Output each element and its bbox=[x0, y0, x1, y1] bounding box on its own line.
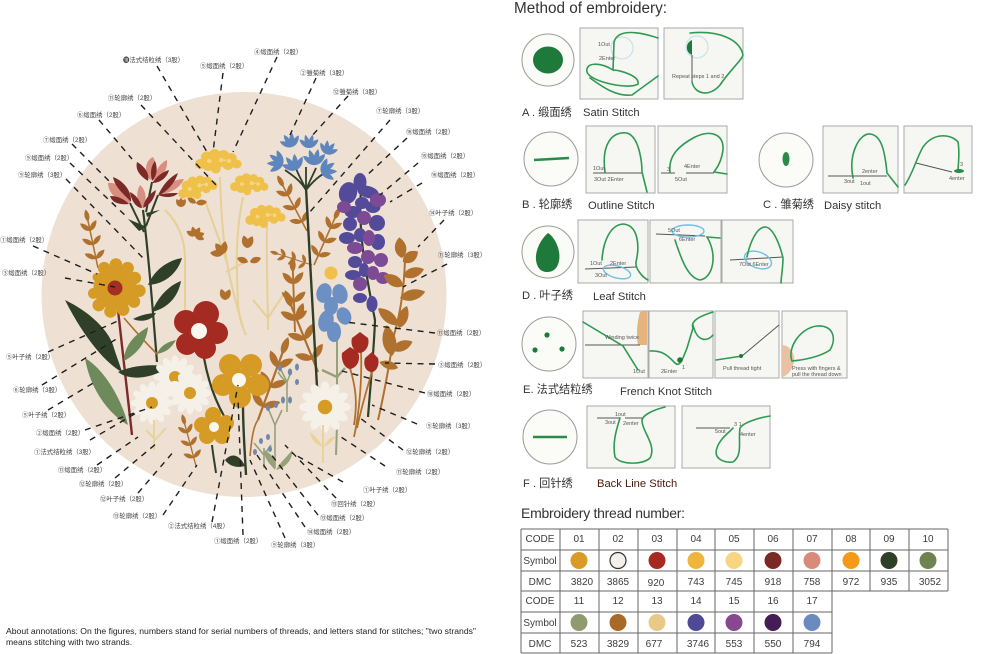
panel: A satin stitch: Satin Stitch bbox=[583, 107, 640, 119]
panel: F back line stitch: F . 回针绣 bbox=[523, 476, 573, 490]
panel: A satin stitch: 1Out bbox=[598, 42, 610, 48]
panel: D leaf stitch: 7Out 6Enter bbox=[739, 262, 769, 268]
thread labels around the pattern: ①法式结粒绣（3股） bbox=[34, 447, 95, 456]
table: thread codes: 920 bbox=[648, 578, 665, 589]
thread labels around the pattern: ⑬缎面绣（2股） bbox=[320, 513, 368, 522]
panel: B outline stitch: 3 bbox=[667, 167, 670, 173]
table: thread codes: 14 bbox=[690, 596, 702, 607]
panel: D leaf stitch: 1Out bbox=[590, 261, 602, 267]
heading: embroidery thread number: Embroidery thread number: bbox=[521, 505, 685, 521]
table: thread codes: 677 bbox=[646, 639, 663, 650]
leaves: cream daisy foliage bbox=[310, 425, 336, 463]
table: thread codes bbox=[521, 529, 948, 653]
thread labels around the pattern: ❿法式结粒绣（3股） bbox=[123, 55, 184, 64]
panel: C daisy stitch: C . 雏菊绣 bbox=[763, 198, 814, 211]
thread labels around the pattern: ②法式结粒绣（4股） bbox=[168, 521, 229, 530]
table: thread codes: 745 bbox=[726, 577, 743, 588]
flower: daisies bbox=[130, 356, 212, 450]
thread labels around the pattern: ⑤叶子绣（2股） bbox=[6, 352, 54, 361]
thread labels around the pattern: ⑩缎面绣（2股） bbox=[427, 389, 475, 398]
table: thread codes: 02 bbox=[612, 534, 624, 545]
thread labels around the pattern: ⑫雏菊绣（3股） bbox=[333, 87, 381, 96]
panel: floral embroidery pattern bbox=[42, 92, 446, 497]
thread labels around the pattern: ①缎面绣（2股） bbox=[214, 536, 262, 545]
table: thread codes: CODE bbox=[526, 534, 555, 545]
thread labels around the pattern: ⑥轮廓绣（3股） bbox=[13, 385, 61, 394]
icon: yellow flower clusters bbox=[175, 149, 286, 230]
panel: B outline stitch: Outline Stitch bbox=[588, 200, 655, 212]
thread labels around the pattern: ①缎面绣（2股） bbox=[0, 235, 48, 244]
thread labels around the pattern: ⑪缎面绣（2股） bbox=[58, 465, 106, 474]
icon: small brown sprigs among the stems bbox=[174, 196, 262, 301]
panel: E french knot stitch: 1Out bbox=[633, 369, 645, 375]
panel: C daisy stitch: 1out bbox=[860, 181, 871, 187]
thread labels around the pattern: ⑦轮廓绣（3股） bbox=[376, 106, 424, 115]
panel: A satin stitch: Repeat steps 1 and 2 bbox=[672, 74, 724, 80]
thread labels around the pattern: ⑨轮廓绣（3股） bbox=[18, 170, 66, 179]
panel: E french knot stitch: 2Enter bbox=[661, 369, 677, 375]
panel: E french knot stitch: Press with fingers & bbox=[792, 366, 841, 372]
thread labels around the pattern: ④缎面绣（2股） bbox=[254, 47, 302, 56]
background circle bbox=[42, 92, 446, 497]
table: thread codes: 13 bbox=[651, 596, 663, 607]
panel: D leaf stitch: Leaf Stitch bbox=[593, 291, 646, 303]
panel: F back line stitch: 2enter bbox=[623, 421, 639, 427]
panel: D leaf stitch bbox=[522, 220, 793, 303]
flower: purple wisteria bbox=[336, 173, 390, 417]
thread labels around the pattern: ⑬轮廓绣（2股） bbox=[113, 511, 161, 520]
panel: E french knot stitch: 1 bbox=[682, 365, 685, 371]
flower: small yellow bloom bbox=[194, 407, 245, 473]
flower: red buds bbox=[342, 332, 379, 437]
table: thread codes: 17 bbox=[806, 596, 818, 607]
table: thread codes: Symbol bbox=[523, 556, 557, 567]
thread labels around the pattern: ⑯缎面绣（2股） bbox=[431, 170, 479, 179]
panel: F back line stitch: 4enter bbox=[740, 432, 756, 438]
table: thread codes: DMC bbox=[529, 639, 551, 650]
table: thread codes: Symbol bbox=[523, 618, 557, 629]
table: thread codes: 553 bbox=[726, 639, 743, 650]
panel: D leaf stitch: 5Out bbox=[668, 228, 680, 234]
table: thread codes: 550 bbox=[765, 639, 782, 650]
thread labels around the pattern: ⑫叶子绣（2股） bbox=[100, 494, 148, 503]
thread labels around the pattern: ⑨轮廓绣（3股） bbox=[271, 540, 319, 549]
thread labels around the pattern: ⑨缎面绣（2股） bbox=[25, 153, 73, 162]
table: thread codes: 3865 bbox=[607, 577, 630, 588]
table: thread codes: 05 bbox=[728, 534, 740, 545]
panel: E french knot stitch: Pull thread tight bbox=[723, 366, 762, 372]
leader lines bbox=[33, 57, 447, 538]
table: thread codes: 06 bbox=[767, 534, 779, 545]
table: thread codes: 04 bbox=[690, 534, 702, 545]
table: thread codes: CODE bbox=[526, 596, 555, 607]
table: thread codes: 01 bbox=[573, 534, 585, 545]
panel: F back line stitch: 1out bbox=[615, 412, 626, 418]
table: thread codes: 10 bbox=[922, 534, 934, 545]
thread labels around the pattern: ⑤缎面绣（2股） bbox=[200, 61, 248, 70]
panel: A satin stitch: A . 缎面绣 bbox=[522, 105, 572, 119]
panel: C daisy stitch: 3out bbox=[844, 179, 855, 185]
table: thread codes: 09 bbox=[883, 534, 895, 545]
panel: A satin stitch: 2Enter bbox=[599, 56, 615, 62]
panel: E french knot stitch bbox=[522, 311, 847, 398]
flower: blue agapanthus bbox=[263, 129, 341, 387]
thread labels around the pattern: ②缎面绣（2股） bbox=[36, 428, 84, 437]
thread labels around the pattern: ①叶子绣（2股） bbox=[363, 485, 411, 494]
table: thread codes: 935 bbox=[881, 577, 898, 588]
panel: D leaf stitch: 2Enter bbox=[610, 261, 626, 267]
panel: E french knot stitch: French Knot Stitch bbox=[620, 386, 712, 398]
icon: brown sprigs bbox=[74, 170, 351, 469]
table: thread codes: 16 bbox=[767, 596, 779, 607]
panel: B outline stitch: 4Enter bbox=[684, 164, 700, 170]
annotation note: means stitching with two strands. bbox=[6, 637, 132, 647]
panel: D leaf stitch: 6Enter bbox=[679, 237, 695, 243]
table: thread codes: 743 bbox=[688, 577, 705, 588]
flower: blue delphinium bbox=[314, 266, 354, 455]
panel: C daisy stitch: 3 bbox=[960, 162, 963, 168]
flower: small blue sprigs bbox=[253, 364, 299, 470]
flower: tulip plant with dark leaves bbox=[108, 157, 184, 362]
thread labels around the pattern: ⑦缎面绣（2股） bbox=[43, 135, 91, 144]
panel: C daisy stitch: 2enter bbox=[862, 169, 878, 175]
panel: D leaf stitch: D . 叶子绣 bbox=[522, 289, 573, 302]
cream stems with yellow clusters bbox=[165, 177, 283, 335]
table: thread codes: 3052 bbox=[919, 577, 942, 588]
annotation note: About annotations: On the figures, numbers stand for serial numbers of threads, and letters stand for stitches; "two strands" bbox=[6, 626, 476, 636]
panel: D leaf stitch: 3Out bbox=[595, 273, 607, 279]
panel: E french knot stitch: pull the thread down bbox=[792, 372, 842, 378]
thread labels around the pattern: ⑤轮廓绣（3股） bbox=[426, 421, 474, 430]
thread labels around the pattern: ⑤叶子绣（2股） bbox=[22, 410, 70, 419]
table: thread codes: 794 bbox=[804, 639, 821, 650]
thread labels around the pattern: ③缎面绣（2股） bbox=[2, 268, 50, 277]
thread labels around the pattern: ⑥缎面绣（2股） bbox=[77, 110, 125, 119]
leaves: large left foliage bbox=[65, 300, 176, 425]
table: thread codes: 3746 bbox=[687, 639, 710, 650]
table: thread codes: 11 bbox=[574, 596, 585, 607]
thread labels around the pattern: ⑪轮廓绣（2股） bbox=[108, 93, 156, 102]
flower: large yellow bloom bbox=[212, 354, 269, 475]
panel: B outline stitch bbox=[522, 126, 727, 212]
panel: E french knot stitch: Winding twice bbox=[605, 335, 639, 341]
flower: orange marigold bbox=[88, 258, 157, 435]
table: thread codes: 918 bbox=[765, 577, 782, 588]
thread labels around the pattern: ⑭叶子绣（2股） bbox=[429, 208, 477, 217]
thread labels around the pattern: ⑪缎面绣（2股） bbox=[437, 328, 485, 337]
panel: B outline stitch: 5Out bbox=[675, 177, 687, 183]
table: thread codes: 758 bbox=[804, 577, 821, 588]
panel: F back line stitch bbox=[523, 406, 770, 490]
table: thread codes: 15 bbox=[728, 596, 740, 607]
panel: B outline stitch: B . 轮廓绣 bbox=[522, 197, 572, 211]
heading: method of embroidery: Method of embroidery: bbox=[514, 0, 667, 17]
panel: F back line stitch: 5out bbox=[715, 429, 726, 435]
thread labels around the pattern: ⑬回针绣（2股） bbox=[331, 499, 379, 508]
panel: C daisy stitch: 4enter bbox=[949, 176, 965, 182]
table: thread codes: 07 bbox=[806, 534, 818, 545]
thread labels around the pattern: ③缎面绣（2股） bbox=[438, 360, 486, 369]
flower: red bloom bbox=[174, 301, 228, 416]
thread labels around the pattern: ⑫轮廓绣（2股） bbox=[79, 479, 127, 488]
flower: white daisy bbox=[299, 381, 351, 433]
annotation note bbox=[6, 626, 476, 647]
thread labels around the pattern: ②雏菊绣（3股） bbox=[300, 68, 348, 77]
thread labels around the pattern bbox=[0, 47, 486, 549]
panel: F back line stitch: Back Line Stitch bbox=[597, 478, 677, 490]
panel: F back line stitch: 3 1 bbox=[734, 422, 742, 428]
thread labels around the pattern: ⑪轮廓绣（2股） bbox=[396, 467, 444, 476]
panel: B outline stitch: 1Out bbox=[593, 166, 605, 172]
panel: A satin stitch bbox=[522, 28, 743, 119]
thread labels around the pattern: ⑪轮廓绣（3股） bbox=[438, 250, 486, 259]
table: thread codes: 523 bbox=[571, 639, 588, 650]
panel: C daisy stitch: Daisy stitch bbox=[824, 200, 881, 212]
table: thread codes: 972 bbox=[843, 577, 860, 588]
table: thread codes: 08 bbox=[845, 534, 857, 545]
thread labels around the pattern: ⑯缎面绣（2股） bbox=[406, 127, 454, 136]
panel: E french knot stitch: E. 法式结粒绣 bbox=[523, 382, 593, 396]
panel: F back line stitch: 3out bbox=[605, 420, 616, 426]
table: thread codes: 3820 bbox=[571, 577, 594, 588]
panel: C daisy stitch bbox=[759, 126, 972, 212]
leaves: brown right sprig bbox=[375, 237, 427, 420]
thread labels around the pattern: ⑮缎面绣（2股） bbox=[421, 151, 469, 160]
table: thread codes: DMC bbox=[529, 577, 551, 588]
panel: B outline stitch: 3Out 2Enter bbox=[594, 177, 624, 183]
thread labels around the pattern: ⑭缎面绣（2股） bbox=[307, 527, 355, 536]
table: thread codes: 3829 bbox=[607, 639, 630, 650]
thread labels around the pattern: ⑫轮廓绣（2股） bbox=[406, 447, 454, 456]
table: thread codes: 03 bbox=[651, 534, 663, 545]
table: thread codes: 12 bbox=[612, 596, 624, 607]
